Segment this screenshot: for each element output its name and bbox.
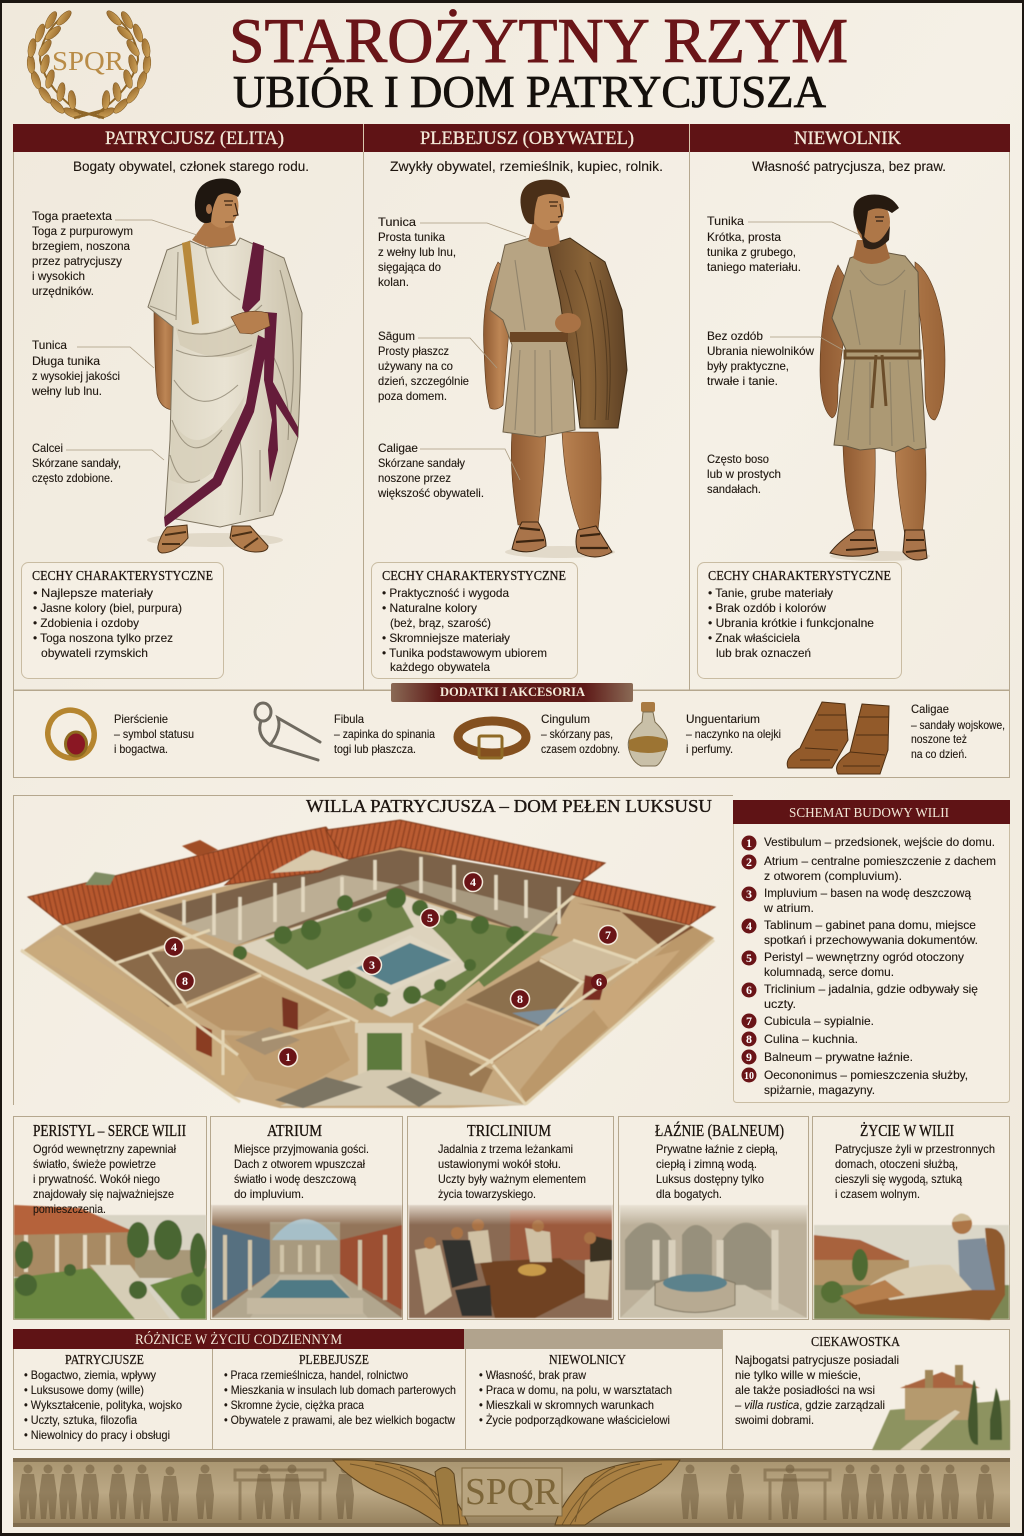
annotations: patrician (31, 209, 197, 485)
panel: triclinium card: TRICLINIUM (467, 1121, 551, 1140)
neck (192, 218, 236, 248)
panel: triclinium card (408, 1116, 614, 1320)
annotations: patrician: Długa tunika (32, 354, 100, 368)
annotations: plebeian: poza domem. (378, 389, 447, 403)
sandals and feet (158, 525, 188, 553)
column: patricians: • Wykształcenie, polityka, wojsko (24, 1398, 182, 1412)
panel: villa legend: kolumnadą, serce domu. (764, 965, 894, 979)
panel: accessories: Fibula (334, 712, 364, 726)
panel: accessories (14, 683, 1010, 778)
header bar: classes: NIEWOLNIK (794, 128, 901, 149)
head (195, 179, 241, 228)
differences header: RÓŻNICE W ŻYCIU CODZIENNYM (135, 1331, 342, 1348)
tunic (490, 238, 575, 437)
panel: baths card: Prywatne łaźnie z ciepłą, (656, 1142, 778, 1156)
panel: atrium card: Dach z otworem wpuszczał (234, 1157, 365, 1171)
icon: ring (40, 703, 102, 765)
panel: villa legend: 4 (746, 919, 752, 933)
pool (347, 935, 458, 992)
right rooms (577, 903, 694, 947)
number markers: 8 (517, 992, 523, 1006)
outer walls (21, 935, 256, 1096)
column: slaves: • Mieszkali w skromnych warunkach (479, 1398, 654, 1412)
annotations: plebeian: Caligae (378, 441, 418, 455)
villa illustration (21, 820, 715, 1108)
panel: accessories: – naczynko na olejki (686, 727, 781, 741)
panel: villa legend: Oecononimus – pomieszczenia służby, (764, 1068, 968, 1082)
arms (820, 262, 945, 420)
accessories badge (391, 683, 633, 702)
panel: accessories: Caligae (911, 702, 949, 716)
curiosity text: Najbogatsi patrycjusze posiadali (735, 1353, 899, 1367)
panel: traits plebeian: • Praktyczność i wygoda (382, 586, 509, 600)
annotations: plebeian: używany na co (378, 359, 453, 373)
annotations: plebeian: z wełny lub lnu, (378, 245, 456, 259)
number markers: 8 (182, 974, 188, 988)
annotations: plebeian: dzień, szczególnie (378, 374, 469, 388)
number markers: 6 (596, 975, 602, 989)
sandals (830, 530, 927, 560)
annotations: patrician: przez patrycjuszy (32, 254, 122, 268)
heading: villa: WILLA PATRYCJUSZA – DOM PEŁEN LUKSUSU (306, 796, 712, 816)
belt (510, 332, 568, 342)
panel: life in villa card: Patrycjusze żyli w przestronnych (835, 1142, 995, 1156)
annotations: plebeian: Prosty płaszcz (378, 344, 449, 358)
panel: villa legend: w atrium. (763, 901, 814, 915)
annotations: slave: taniego materiału. (707, 260, 801, 274)
panel: baths card: Luksus dostępny tylko (656, 1172, 764, 1186)
toga body (148, 238, 302, 527)
panel: accessories: i bogactwa. (114, 742, 168, 756)
column: slaves: NIEWOLNICY (549, 1353, 626, 1368)
header bar: classes (13, 124, 1010, 152)
panel: villa legend: 7 (746, 1014, 752, 1028)
number markers: 5 (427, 911, 433, 925)
panel: accessories: czasem ozdobny. (541, 742, 620, 756)
panel: triclinium card: Jadalnia z trzema leżankami (438, 1142, 573, 1156)
panel: accessories: – zapinka do spinania (334, 727, 435, 741)
panel: villa legend: Vestibulum – przedsionek, wejście do domu. (764, 835, 995, 849)
panel: triclinium card: ustawionymi wokół stołu. (438, 1157, 561, 1171)
accessories badge: DODATKI I AKCESORIA (440, 685, 585, 699)
column: patricians (24, 1353, 182, 1442)
curiosity text: CIEKAWOSTKA (811, 1335, 901, 1350)
panel: villa legend: 8 (746, 1032, 752, 1046)
panel: villa legend: 9 (746, 1050, 752, 1064)
column: slaves: • Praca w domu, na polu, w warsztatach (479, 1383, 672, 1397)
panel: traits patrician (22, 562, 224, 678)
annotations: plebeian: Prosta tunika (378, 230, 445, 244)
cloak (548, 238, 627, 428)
panel: villa frame (14, 796, 733, 1105)
neck (528, 222, 560, 247)
base footprint (21, 845, 714, 1108)
panel: traits plebeian: • Naturalne kolory (382, 601, 477, 615)
curiosity text: nie tylko wille w mieście, (735, 1368, 861, 1382)
wall tops (21, 895, 714, 1105)
panel: triclinium card: Uczty były ważnym elementem (438, 1172, 586, 1186)
class descriptions: Zwykły obywatel, rzemieślnik, kupiec, rolnik. (390, 159, 663, 174)
annotations: patrician: Skórzane sandały, (32, 456, 121, 470)
triclinium scene (409, 1205, 612, 1318)
panel: baths card: ciepłą i zimną wodą. (656, 1157, 757, 1171)
gardens (265, 895, 414, 970)
panel: villa legend: 6 (746, 983, 752, 997)
panel: traits plebeian: • Tunika podstawowym ubiorem (382, 646, 547, 660)
panel: accessories: Unguentarium (686, 712, 760, 726)
panel: atrium card (210, 1116, 402, 1320)
panel: traits patrician: obywateli rzymskich (41, 646, 148, 660)
panel: daily life differences (13, 1329, 1010, 1450)
curiosity text (735, 1335, 901, 1427)
column: plebeians: • Skromne życie, ciężka praca (224, 1398, 364, 1412)
annotations: slave: Ubrania niewolników (707, 344, 814, 358)
panel: traits plebeian: (beż, brąz, szarość) (390, 616, 491, 630)
figure: plebeian (484, 180, 627, 558)
figure: slave (820, 195, 945, 561)
baths scene (620, 1205, 807, 1318)
figure: patrician (147, 179, 302, 553)
column: patricians: • Bogactwo, ziemia, wpływy (24, 1368, 156, 1382)
panel: traits patrician: • Toga noszona tylko przez (33, 631, 173, 645)
panel: villa legend: spiżarnie, magazyny. (764, 1083, 875, 1097)
panel: villa legend: Triclinium – jadalnia, gdzie odbywały się (764, 982, 978, 996)
column: plebeians: • Praca rzemieślnicza, handel, rolnictwo (224, 1368, 408, 1382)
laurel wreath SPQR logo: SPQR (52, 46, 124, 76)
panel: traits slave: • Brak ozdób i kolorów (708, 601, 826, 615)
header bar: classes: PLEBEJUSZ (OBYWATEL) (420, 128, 634, 149)
head (520, 180, 570, 230)
panel: traits slave: • Znak właściciela (708, 631, 800, 645)
legend header (733, 800, 1010, 824)
panel: traits patrician: CECHY CHARAKTERYSTYCZNE (32, 569, 213, 584)
annotations: patrician: z wysokiej jakości (32, 369, 120, 383)
legend header: SCHEMAT BUDOWY WILII (789, 806, 949, 821)
panel: traits patrician: • Zdobienia i ozdoby (33, 616, 139, 630)
panel: traits plebeian (372, 562, 578, 678)
annotations: slave: sandałach. (707, 482, 761, 496)
annotations: plebeian: Sāgum (378, 329, 415, 343)
panel: villa legend: 2 (746, 855, 752, 869)
left rooms (70, 913, 186, 963)
panel: villa legend: spotkań i przechowywania dokumentów. (764, 933, 978, 947)
entrance gate (355, 1023, 413, 1075)
number markers: 4 (171, 940, 177, 954)
panel: accessories: – sandały wojskowe, (911, 718, 1005, 732)
annotations: plebeian: noszone przez (378, 471, 451, 485)
icon: caligae boots (787, 702, 889, 774)
panel: villa legend: 10 (744, 1071, 754, 1082)
panel: life in villa card: ŻYCIE W WILII (860, 1121, 954, 1140)
panel: accessories: – skórzany pas, (541, 727, 613, 741)
annotations: patrician: Toga praetexta (32, 209, 112, 223)
panel: atrium card: do impluvium. (234, 1187, 304, 1201)
annotations: slave: Często boso (707, 452, 769, 466)
relief figures left (19, 1464, 354, 1521)
panel: life in villa card: domach, otoczeni służbą, (835, 1157, 958, 1171)
curiosity vignette (872, 1365, 1010, 1450)
atrium scene (212, 1205, 402, 1318)
panel: traits patrician: • Najlepsze materiały (33, 586, 153, 600)
panel: traits slave: lub brak oznaczeń (716, 646, 811, 660)
class descriptions (73, 159, 946, 174)
annotations: slave: były praktyczne, (707, 359, 789, 373)
hand (555, 313, 581, 333)
annotations: plebeian: kolan. (378, 275, 409, 289)
frieze (13, 1458, 1010, 1527)
annotations: slave: tunika z grubego, (707, 245, 796, 259)
panel: peristyle card (14, 1116, 206, 1320)
panel: accessories: togi lub płaszcza. (334, 742, 416, 756)
left arm (154, 312, 176, 410)
panel: accessories: Pierścienie (114, 712, 168, 726)
column: patricians: • Uczty, sztuka, filozofia (24, 1413, 137, 1427)
annotations: plebeian: większość obywateli. (377, 486, 484, 500)
panel: baths card: dla bogatych. (656, 1187, 722, 1201)
panel: villa legend: Impluvium – basen na wodę deszczową (764, 886, 971, 900)
title (229, 5, 848, 117)
courtyard paving (237, 893, 549, 1017)
annotations: patrician: Calcei (32, 441, 63, 455)
panel: life in villa card (812, 1116, 1010, 1320)
icon: belt (458, 721, 526, 758)
annotations: slave: Bez ozdób (707, 329, 763, 343)
left arm (484, 262, 516, 409)
curiosity text: swoimi dobrami. (735, 1413, 814, 1427)
panel: accessories: noszone też (911, 732, 967, 746)
trees (233, 888, 524, 1007)
annotations: patrician: urzędników. (32, 284, 94, 298)
class descriptions: Własność patrycjusza, bez praw. (752, 159, 946, 174)
title: STAROŻYTNY RZYM (229, 5, 848, 76)
legs (511, 432, 601, 530)
panel: villa legend: Tablinum – gabinet pana domu, miejsce (764, 918, 976, 932)
column: slaves (479, 1353, 672, 1427)
number markers (164, 872, 618, 1066)
column: plebeians: • Obywatele z prawami, ale bez wielkich bogactw (224, 1413, 455, 1427)
annotations: patrician: wełny lub lnu. (31, 384, 102, 398)
life scene (814, 1213, 1009, 1320)
annotations: slave: lub w prostych (707, 467, 781, 481)
column: plebeians: • Mieszkania w insulach lub domach parterowych (224, 1383, 456, 1397)
icon: unguentarium (628, 702, 668, 766)
entry forecourt (280, 1070, 525, 1106)
panel: traits plebeian: • Skromniejsze materiały (382, 631, 510, 645)
panel: accessories: i perfumy. (686, 742, 733, 756)
column: slaves: • Własność, brak praw (479, 1368, 586, 1382)
number markers: 7 (605, 928, 611, 942)
panel: villa legend: 5 (746, 951, 752, 965)
head (853, 195, 899, 249)
relief figures right (681, 1464, 994, 1520)
annotations: patrician: często zdobione. (32, 471, 113, 485)
annotations: slave: Krótka, prosta (707, 230, 781, 244)
panel: traits plebeian: CECHY CHARAKTERYSTYCZNE (382, 569, 566, 584)
column: patricians: • Niewolnicy do pracy i obsługi (24, 1428, 170, 1442)
legs (843, 445, 926, 535)
panel: life in villa card: i czasem wolnym. (835, 1187, 920, 1201)
curiosity text: ale także posiadłości na wsi (735, 1383, 875, 1397)
annotations: plebeian: sięgająca do (378, 260, 441, 274)
panel: villa legend (733, 800, 1010, 1102)
column: slaves: • Życie podporządkowane właścicielowi (479, 1413, 670, 1427)
hand (231, 311, 270, 334)
panel: peristyle card: i prywatność. Wokół niego (33, 1172, 160, 1186)
panel: life in villa card: cieszyli się wygodą, sztuką (835, 1172, 962, 1186)
gold stripe (182, 241, 199, 325)
column: patricians: • Luksusowe domy (wille) (24, 1383, 144, 1397)
panel: villa legend: Culina – kuchnia. (764, 1032, 858, 1046)
sandals (512, 522, 612, 557)
neck (853, 240, 890, 264)
panel: villa legend: Cubicula – sypialnie. (764, 1014, 874, 1028)
annotations: slave: Tunika (707, 214, 744, 228)
rope belt (845, 351, 920, 408)
class descriptions: Bogaty obywatel, członek starego rodu. (73, 159, 309, 174)
panel: accessories: Cingulum (541, 712, 590, 726)
panel: villa legend: Peristyl – wewnętrzny ogród otoczony (764, 950, 964, 964)
panel: traits slave: • Tanie, grube materiały (708, 586, 833, 600)
annotations: patrician: Toga z purpurowym (32, 224, 133, 238)
number markers: 3 (369, 958, 375, 972)
annotations: plebeian: Skórzane sandały (378, 456, 465, 470)
panel: traits slave: • Ubrania krótkie i funkcjonalne (708, 616, 874, 630)
differences header (13, 1329, 464, 1349)
header bar: classes: PATRYCJUSZ (ELITA) (105, 128, 284, 149)
curiosity text: – villa rustica, gdzie zarządzali (735, 1398, 885, 1412)
purple band (164, 242, 298, 527)
annotations: patrician: brzegiem, noszona (32, 239, 130, 253)
panel: accessories: na co dzień. (911, 747, 967, 761)
panel: traits slave (698, 562, 902, 678)
tunic (832, 250, 926, 452)
annotations: slave (707, 214, 860, 496)
panel: peristyle card: światło, świeże powietrze (33, 1157, 156, 1171)
panel: peristyle card: znajdowały się najważniejsze (33, 1187, 174, 1201)
annotations: plebeian (377, 215, 526, 500)
panel: atrium card: ATRIUM (267, 1121, 322, 1140)
annotations: slave: trwałe i tanie. (707, 374, 778, 388)
annotations: patrician: i wysokich (32, 269, 85, 283)
number markers: 4 (470, 875, 476, 889)
column: plebeians: PLEBEJUSZE (299, 1353, 369, 1368)
panel: peristyle card: Ogród wewnętrzny zapewniał (33, 1142, 176, 1156)
laurel wreath SPQR logo (26, 9, 152, 120)
panel: peristyle card: pomieszczenia. (33, 1202, 106, 1216)
colonnade interiors (154, 850, 582, 945)
panel: atrium card: Miejsce przyjmowania gości. (234, 1142, 369, 1156)
panel: villa legend: uczty. (764, 997, 796, 1011)
eagle: SPQR (465, 1471, 560, 1513)
panel: triclinium card: życia towarzyskiego. (438, 1187, 536, 1201)
panel: baths card (618, 1116, 808, 1320)
panel: villa legend: z otworem (compluvium). (764, 869, 902, 883)
panel: traits slave: CECHY CHARAKTERYSTYCZNE (708, 569, 891, 584)
number markers: 1 (285, 1050, 291, 1064)
annotations: plebeian: Tunica (378, 215, 416, 229)
panel: peristyle card: PERISTYL – SERCE WILII (33, 1121, 186, 1140)
panel: villa legend: 1 (746, 836, 752, 850)
column: plebeians (224, 1353, 456, 1427)
subtitle: UBIÓR I DOM PATRYCJUSZA (233, 67, 826, 117)
column: patricians: PATRYCJUSZE (65, 1353, 144, 1368)
roofs (28, 837, 312, 925)
annotations: patrician: Tunica (32, 338, 67, 352)
panel: traits plebeian: każdego obywatela (390, 660, 490, 674)
panel: villa legend: 3 (746, 887, 752, 901)
icon: fibula (255, 703, 320, 760)
panel: accessories: – symbol statusu (114, 727, 194, 741)
peristyle scene (14, 1205, 206, 1319)
panel: traits patrician: • Jasne kolory (biel, purpura) (33, 601, 182, 615)
eagle (333, 1460, 680, 1525)
panel: villa legend: Atrium – centralne pomieszczenie z dachem (764, 854, 996, 868)
panel: villa legend: Balneum – prywatne łaźnie. (764, 1050, 913, 1064)
panel: social classes frame (14, 152, 1010, 690)
panel: atrium card: światło i wodę deszczową (234, 1172, 356, 1186)
panel: baths card: ŁAŹNIE (BALNEUM) (655, 1121, 784, 1140)
